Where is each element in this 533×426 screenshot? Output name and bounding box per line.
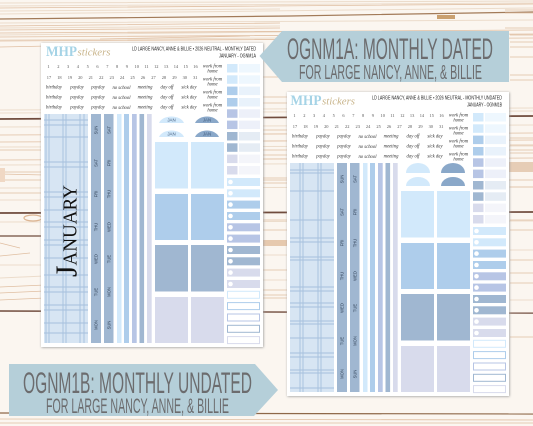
event word stickers: day off — [407, 144, 420, 150]
event word stickers: day off — [161, 106, 174, 110]
date numbers: 15 — [184, 64, 189, 69]
date numbers: 14 — [174, 64, 179, 69]
weekday strips: MON — [340, 369, 344, 379]
logo: MHP stickers: stickers — [78, 48, 111, 58]
date numbers: 16 — [193, 64, 198, 69]
event word stickers: day off — [161, 96, 174, 100]
weekday strips: FRI — [106, 160, 111, 166]
date numbers: 23 — [110, 75, 115, 80]
plaid panel with January: JANUARY — [48, 185, 84, 277]
square and bar stickers — [473, 113, 506, 224]
event word stickers: no school — [358, 155, 377, 160]
date numbers: 26 — [387, 124, 392, 129]
month half-circle tabs: JAN — [203, 132, 211, 136]
event word stickers: home — [207, 108, 218, 114]
date numbers: 29 — [418, 124, 423, 129]
date numbers: 5 — [333, 113, 336, 118]
event word stickers: home — [207, 96, 218, 100]
weekday strips: TUE — [106, 255, 111, 263]
date numbers: 1 — [293, 113, 296, 118]
date numbers: 22 — [99, 75, 103, 80]
event word stickers: work from — [203, 64, 223, 70]
date numbers: 9 — [372, 113, 375, 118]
event word stickers: no school — [112, 86, 131, 91]
date numbers: 6 — [342, 113, 345, 118]
date numbers: 22 — [345, 124, 349, 129]
sheet title: JANUARY - OGNM1A — [219, 54, 256, 60]
event word stickers: payday — [336, 144, 352, 150]
date numbers: 4 — [77, 64, 80, 69]
sheet: OGNM1A monthly dated — [41, 43, 264, 348]
date numbers: 19 — [68, 75, 73, 80]
date numbers: 12 — [154, 64, 158, 69]
date numbers: 20 — [324, 124, 329, 129]
weekday strips: SAT — [340, 208, 344, 216]
event word stickers: work from — [203, 104, 223, 108]
month half-circle tabs: JAN — [167, 118, 176, 122]
event word stickers — [46, 64, 223, 114]
date numbers: 30 — [429, 124, 434, 129]
event word stickers: payday — [90, 96, 106, 100]
weekday strips: WED — [340, 303, 344, 313]
date numbers: 18 — [57, 75, 62, 80]
event word stickers: work from — [449, 114, 469, 118]
date numbers: 10 — [381, 113, 386, 118]
date numbers: 31 — [439, 124, 443, 129]
weekday strips: MON — [106, 287, 111, 297]
event word stickers: payday — [69, 106, 85, 110]
weekday strips: TUE — [94, 288, 98, 296]
date numbers: 7 — [352, 113, 355, 118]
event word stickers: payday — [69, 96, 85, 100]
weekday strips: WED — [106, 222, 111, 232]
date numbers: 10 — [135, 64, 140, 69]
event word stickers: payday — [315, 134, 331, 140]
date numbers: 24 — [120, 75, 125, 80]
weekday strips: THU — [106, 190, 111, 198]
event word stickers: day off — [407, 134, 420, 140]
date numbers: 23 — [356, 124, 361, 129]
sheet title: JANUARY - OGNM1B — [467, 102, 502, 108]
event word stickers: meeting — [138, 96, 153, 100]
event word stickers: day off — [407, 154, 420, 160]
date numbers: 25 — [376, 124, 382, 129]
date numbers — [293, 113, 444, 129]
date numbers: 13 — [410, 113, 415, 118]
date numbers: 28 — [408, 124, 413, 129]
date numbers: 12 — [400, 113, 404, 118]
logo: MHP stickers: MHP — [290, 93, 322, 109]
date numbers: 15 — [430, 113, 435, 118]
date numbers: 31 — [193, 75, 197, 80]
weekday strips: SUN — [94, 126, 98, 134]
event word stickers: birthday — [292, 134, 309, 140]
event word stickers: meeting — [384, 134, 399, 140]
event word stickers: sick day — [427, 154, 444, 160]
event word stickers: home — [453, 118, 464, 124]
event word stickers: meeting — [138, 106, 153, 110]
event word stickers: no school — [112, 96, 131, 101]
date numbers: 3 — [313, 113, 316, 118]
date numbers — [47, 64, 198, 80]
dot bar stickers — [473, 227, 506, 337]
date numbers: 28 — [162, 75, 167, 80]
event word stickers: home — [207, 82, 218, 88]
date numbers: 25 — [130, 75, 136, 80]
date numbers: 21 — [89, 75, 93, 80]
weekday strips — [337, 163, 360, 392]
weekday strips: SAT — [106, 126, 111, 134]
date numbers: 20 — [78, 75, 83, 80]
date numbers: 11 — [390, 113, 395, 118]
plaid panel with January — [44, 114, 88, 343]
event word stickers: payday — [315, 144, 331, 150]
date numbers: 13 — [164, 64, 169, 69]
event word stickers: sick day — [181, 106, 198, 110]
logo: MHP stickers — [46, 44, 111, 60]
event word stickers: work from — [449, 140, 469, 144]
weekday strips: SUN — [340, 175, 344, 183]
date numbers: 26 — [141, 75, 146, 80]
event word stickers: no school — [358, 145, 377, 150]
arrow banner: OGNM1B monthly undated — [9, 364, 278, 418]
weekday strips: FRI — [340, 240, 344, 246]
dot bar stickers — [227, 178, 260, 288]
weekday strips — [91, 114, 114, 343]
date numbers: 3 — [67, 64, 70, 69]
weekday strips: SUN — [352, 370, 357, 378]
large colour boxes — [401, 191, 470, 392]
date numbers: 29 — [172, 75, 177, 80]
narrow colour strips — [363, 163, 398, 392]
event word stickers: home — [453, 132, 464, 136]
date numbers: 7 — [106, 64, 109, 69]
arrow banner: OGNM1A monthly dated — [260, 31, 509, 84]
event word stickers: home — [453, 144, 464, 150]
sheet title — [132, 46, 256, 60]
event word stickers: payday — [90, 106, 106, 110]
sheet title — [372, 96, 502, 108]
date numbers: 17 — [293, 124, 298, 129]
date numbers: 16 — [439, 113, 444, 118]
weekday strips: TUE — [340, 337, 344, 345]
date numbers: 4 — [323, 113, 326, 118]
event word stickers: home — [453, 158, 464, 162]
weekday strips: MON — [352, 336, 357, 346]
outlined bar stickers — [474, 340, 506, 393]
weekday strips: WED — [94, 254, 98, 264]
event word stickers: work from — [203, 78, 223, 82]
event word stickers: birthday — [292, 144, 309, 150]
event word stickers: birthday — [46, 106, 63, 110]
sheet: OGNM1B monthly undated — [287, 92, 510, 396]
event word stickers: day off — [161, 86, 174, 90]
large colour boxes — [155, 142, 224, 343]
weekday strips: SUN — [106, 321, 111, 329]
event word stickers: sick day — [181, 96, 198, 100]
month half-circle tabs: JAN — [203, 118, 211, 122]
event word stickers: meeting — [384, 144, 399, 150]
weekday strips: THU — [94, 223, 98, 231]
weekday strips: WED — [352, 271, 357, 281]
event word stickers: payday — [336, 154, 352, 160]
weekday strips: FRI — [94, 191, 98, 197]
event word stickers: meeting — [138, 86, 153, 90]
event word stickers: payday — [336, 134, 352, 140]
date numbers: 2 — [303, 113, 305, 118]
date numbers: 27 — [397, 124, 402, 129]
month half-circle tabs — [159, 116, 219, 137]
plaid panel — [290, 163, 334, 392]
date numbers: 14 — [420, 113, 425, 118]
weekday strips: FRI — [352, 209, 357, 215]
date numbers: 5 — [87, 64, 90, 69]
date numbers: 19 — [314, 124, 319, 129]
logo: MHP stickers: stickers — [322, 96, 355, 108]
sheet title: LD LARGE NANCY, ANNE & BILLIE • 2026 NEUTRAL - MONTHLY DATED — [132, 46, 256, 52]
logo: MHP stickers — [290, 93, 355, 109]
event word stickers: birthday — [292, 154, 309, 160]
weekday strips: SAT — [94, 159, 98, 167]
weekday strips: TUE — [352, 304, 357, 312]
event word stickers: work from — [203, 90, 223, 96]
arrow banner: OGNM1B monthly undated: OGNM1B: MONTHLY UNDATED — [23, 367, 252, 400]
event word stickers: payday — [90, 86, 106, 90]
date numbers: 1 — [47, 64, 50, 69]
event word stickers: payday — [315, 154, 331, 160]
event word stickers: home — [207, 70, 218, 74]
date numbers: 27 — [151, 75, 156, 80]
date numbers: 9 — [126, 64, 129, 69]
month half-circle tabs: JAN — [167, 132, 176, 136]
event word stickers: birthday — [46, 96, 63, 100]
date numbers: 11 — [144, 64, 149, 69]
weekday strips: SAT — [352, 175, 357, 183]
weekday strips: THU — [340, 272, 344, 280]
event word stickers: meeting — [384, 154, 399, 160]
weekday strips: MON — [94, 320, 98, 330]
date numbers: 18 — [303, 124, 308, 129]
event word stickers: payday — [69, 86, 85, 90]
event word stickers: no school — [358, 135, 377, 140]
arrow banner: OGNM1B monthly undated: FOR LARGE NANCY, ANNE, & BILLIE — [46, 395, 229, 418]
half-circle tabs — [406, 163, 465, 186]
date numbers: 24 — [366, 124, 371, 129]
date numbers: 6 — [96, 64, 99, 69]
date numbers: 8 — [116, 64, 119, 69]
event word stickers: sick day — [427, 144, 444, 150]
event word stickers: sick day — [181, 86, 198, 90]
outlined bar stickers — [228, 291, 260, 344]
date numbers: 8 — [362, 113, 365, 118]
date numbers: 2 — [57, 64, 59, 69]
logo: MHP stickers: MHP — [46, 44, 77, 60]
event word stickers: birthday — [46, 86, 63, 90]
date numbers: 30 — [183, 75, 188, 80]
event word stickers: no school — [112, 106, 131, 111]
event word stickers: sick day — [427, 134, 444, 140]
event word stickers: work from — [449, 152, 469, 158]
event word stickers: work from — [449, 126, 469, 132]
square and bar stickers — [227, 64, 260, 174]
date numbers: 21 — [335, 124, 339, 129]
date numbers: 17 — [47, 75, 52, 80]
weekday strips: THU — [352, 239, 357, 247]
event word stickers — [292, 114, 469, 162]
narrow colour strips — [117, 114, 152, 343]
